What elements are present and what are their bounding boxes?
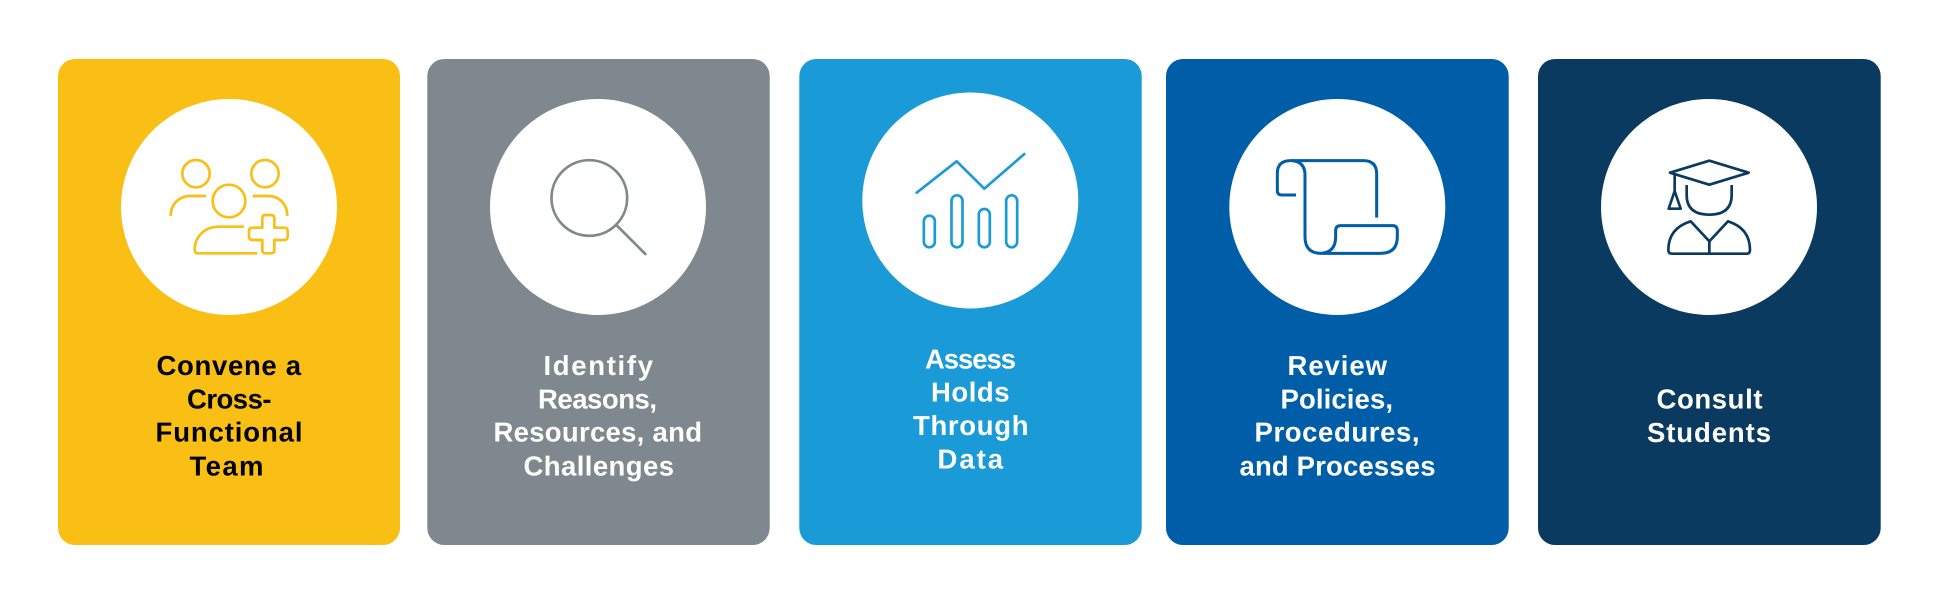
heading: Identify Reasons, Resources, and Challenges: Reasons, bbox=[538, 383, 657, 414]
heading: Review Policies, Procedures, and Processes: Procedures, bbox=[1254, 417, 1420, 448]
card background: yellow bbox=[58, 59, 400, 545]
heading: Consult Students: Consult bbox=[1656, 383, 1762, 414]
icon circle: yellow card bbox=[121, 99, 337, 315]
icon: line and bar chart bbox=[917, 154, 1024, 247]
icon circle: light blue card bbox=[862, 92, 1078, 308]
icon: team with plus bbox=[171, 160, 288, 253]
heading: Identify Reasons, Resources, and Challenges: Identify bbox=[544, 350, 654, 381]
heading: Assess Holds Through Data bbox=[913, 343, 1028, 475]
panel: Convene a Cross-Functional Team bbox=[58, 59, 400, 545]
heading: Identify Reasons, Resources, and Challenges: Resources, and bbox=[494, 417, 702, 448]
panel: Consult Students bbox=[1538, 59, 1881, 545]
icon circle: navy card bbox=[1601, 99, 1817, 315]
heading: Consult Students bbox=[1647, 383, 1771, 448]
icon: magnifying glass bbox=[551, 160, 645, 254]
heading: Assess Holds Through Data: Through bbox=[913, 410, 1028, 441]
panel: Assess Holds Through Data bbox=[799, 59, 1142, 545]
heading: Convene a Cross-Functional Team: Cross- bbox=[187, 383, 272, 414]
heading: Assess Holds Through Data: Assess bbox=[925, 343, 1016, 374]
heading: Consult Students: Students bbox=[1647, 417, 1771, 448]
icon: graduate bbox=[1668, 161, 1750, 254]
heading: Assess Holds Through Data: Holds bbox=[931, 377, 1010, 408]
card background: grey bbox=[427, 59, 770, 545]
icon: paper scroll bbox=[1277, 161, 1397, 253]
card background: navy bbox=[1538, 59, 1881, 545]
heading: Review Policies, Procedures, and Processes: Review bbox=[1288, 350, 1388, 381]
heading: Identify Reasons, Resources, and Challenges: Challenges bbox=[524, 450, 674, 481]
heading: Convene a Cross-Functional Team: Team bbox=[190, 450, 264, 481]
icon circle: grey card bbox=[490, 99, 706, 315]
panel: Review Policies, Procedures, and Processes bbox=[1166, 59, 1509, 545]
heading: Review Policies, Procedures, and Processes: Policies, bbox=[1280, 383, 1393, 414]
heading: Identify Reasons, Resources, and Challenges bbox=[494, 350, 702, 481]
heading: Convene a Cross-Functional Team: Functional bbox=[156, 417, 302, 448]
heading: Convene a Cross-Functional Team bbox=[156, 350, 302, 481]
icon circle: blue card bbox=[1229, 99, 1445, 315]
heading: Review Policies, Procedures, and Processes bbox=[1240, 350, 1436, 481]
heading: Review Policies, Procedures, and Processes: and Processes bbox=[1240, 450, 1436, 481]
card background: blue bbox=[1166, 59, 1509, 545]
card background: light blue bbox=[799, 59, 1142, 545]
heading: Assess Holds Through Data: Data bbox=[938, 444, 1004, 475]
heading: Convene a Cross-Functional Team: Convene a bbox=[156, 350, 302, 381]
panel: Identify Reasons, Resources, and Challenges bbox=[427, 59, 770, 545]
